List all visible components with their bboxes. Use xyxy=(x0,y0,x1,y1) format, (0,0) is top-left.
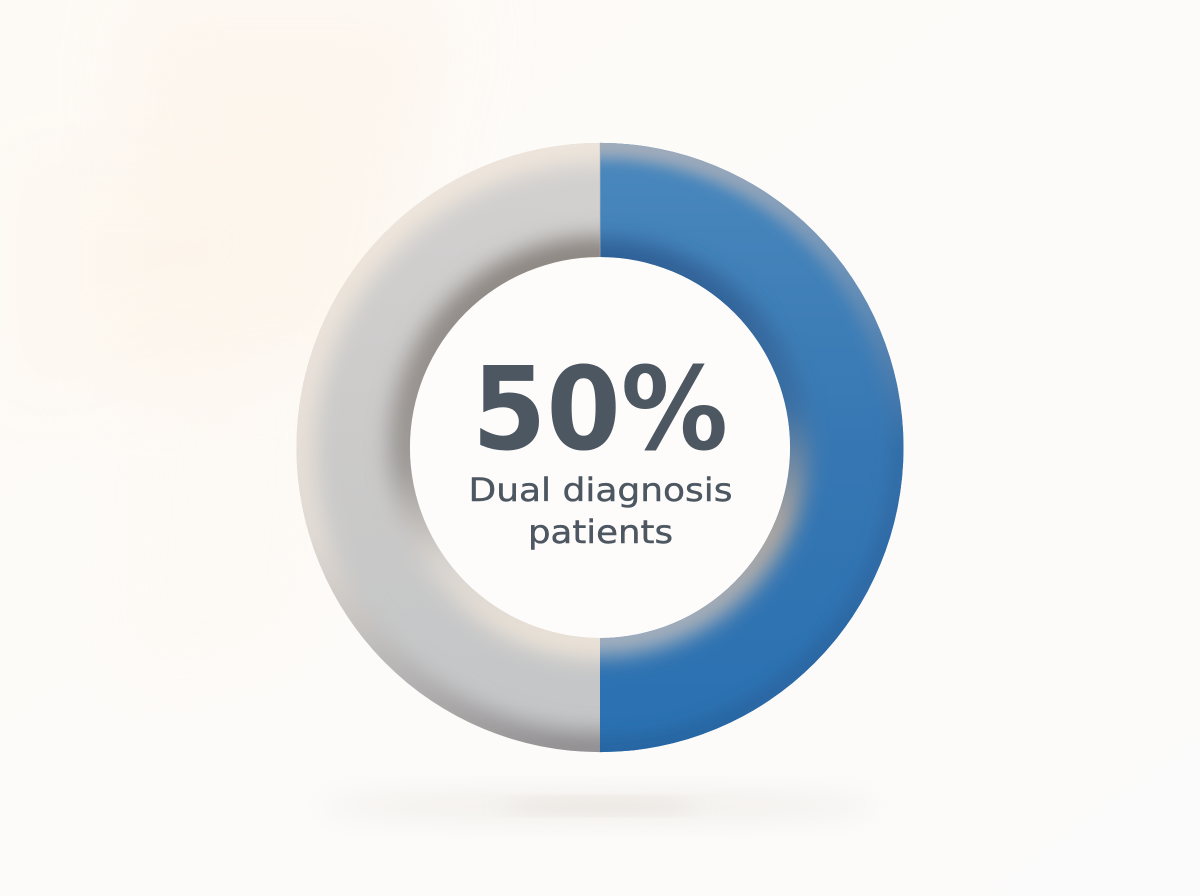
segment: blue 50% dual diagnosis xyxy=(600,142,904,752)
centre disc xyxy=(410,258,790,638)
caption line 1: Dual diagnosis xyxy=(468,471,732,509)
centre label xyxy=(468,343,732,551)
floor shadow xyxy=(320,792,880,820)
value: 50%: 50% xyxy=(472,343,728,477)
caption line 2: patients xyxy=(528,513,673,551)
segment: grey remaining 50% xyxy=(296,142,600,752)
infographic canvas xyxy=(21,0,904,820)
donut chart xyxy=(297,143,903,750)
seam between segments xyxy=(600,143,601,257)
